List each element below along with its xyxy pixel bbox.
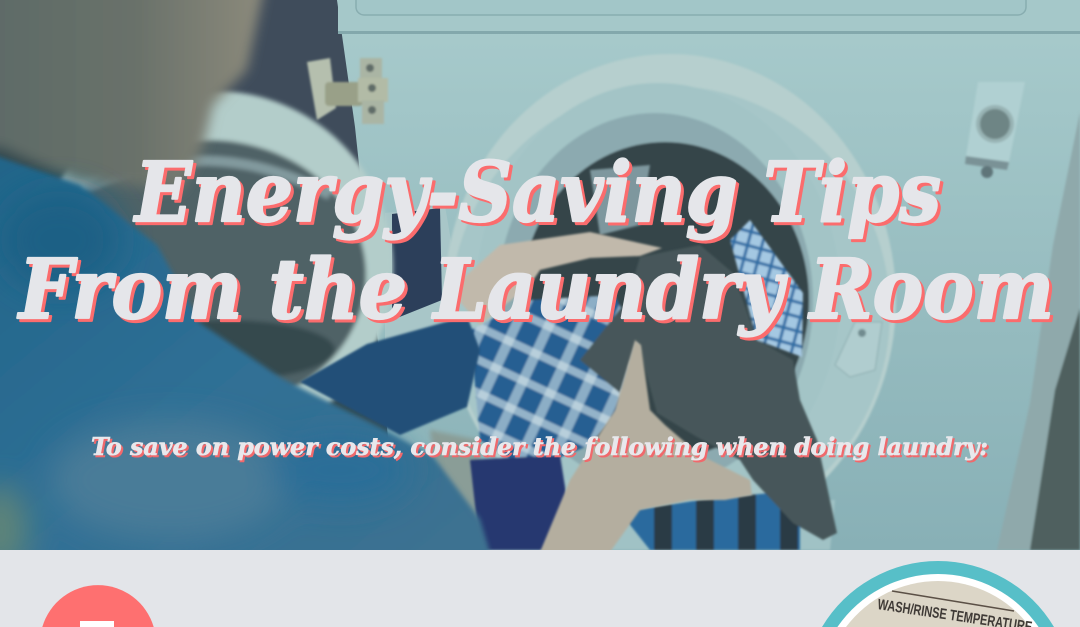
circular photo: wash/rinse temperature label	[822, 561, 1054, 627]
washing machine body	[337, 0, 1080, 550]
sleeve	[300, 316, 480, 435]
right edge of machine	[997, 112, 1080, 550]
person hair	[0, 0, 268, 190]
subtitle: To save on power costs, consider the following when doing laundry:	[91, 432, 988, 461]
clothes	[470, 165, 837, 550]
hinge	[307, 58, 388, 124]
person plaid shirt	[0, 155, 491, 550]
main title	[17, 145, 1054, 338]
main drum	[444, 54, 896, 550]
wall switch	[965, 82, 1025, 178]
coral step badge	[42, 585, 154, 627]
floor of the drum	[429, 429, 482, 514]
arm and hands	[450, 232, 752, 552]
left open door	[60, 89, 396, 404]
photo base	[0, 138, 388, 436]
lower panel	[0, 550, 1080, 627]
main title: Energy-Saving Tips	[133, 145, 941, 241]
door panel edge	[385, 208, 450, 339]
shirt colour patches	[0, 190, 410, 575]
dark gap between machines	[232, 0, 358, 162]
